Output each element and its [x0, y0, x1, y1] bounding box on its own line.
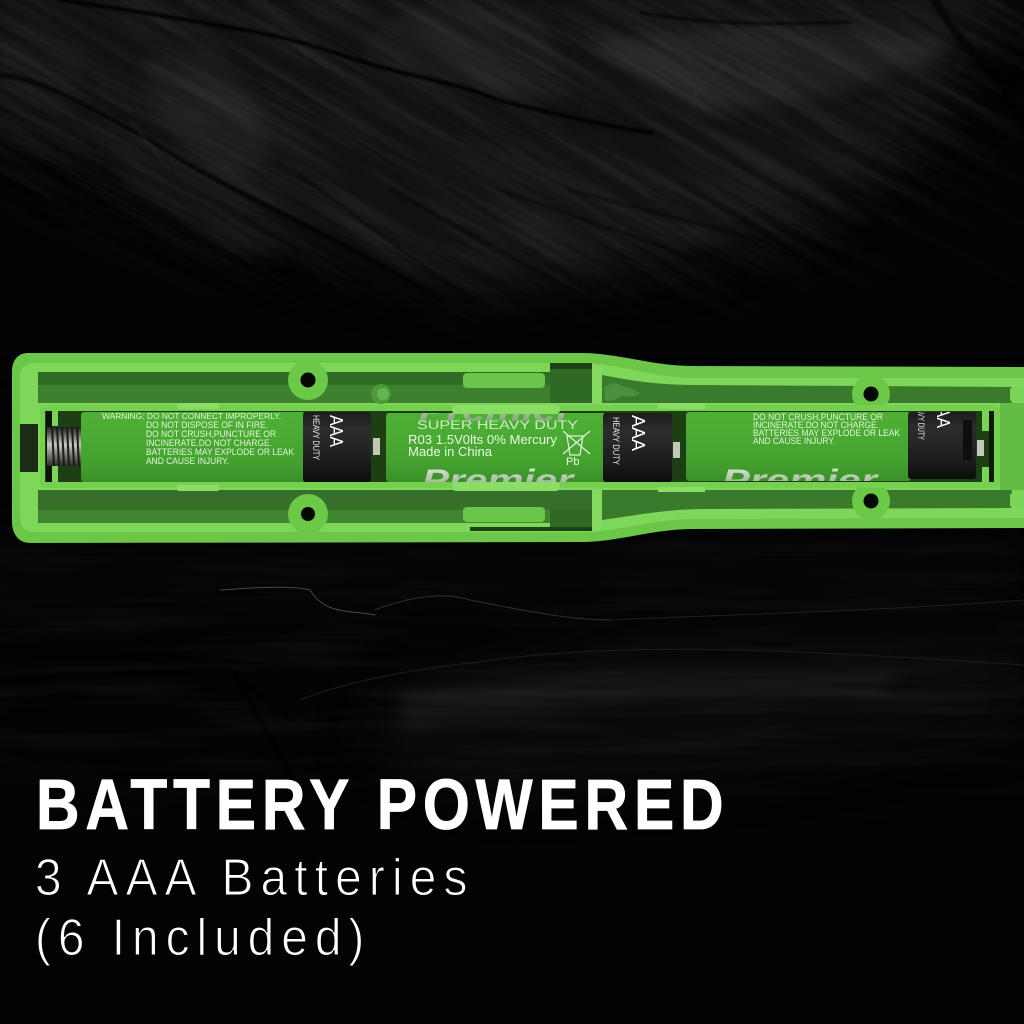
- battery 2: HEAVY DUTY: [611, 417, 621, 465]
- battery 1 warning text: [102, 411, 295, 467]
- screw post: bottom right: [852, 482, 890, 520]
- battery tray: [40, 405, 1000, 488]
- right end tabs: [1010, 387, 1024, 508]
- housing shell: [12, 353, 1024, 543]
- battery 3: Premier: [722, 464, 880, 497]
- shadowed rock areas: [0, 70, 1024, 380]
- screw post: bottom left: [288, 494, 328, 534]
- battery 2: [386, 413, 672, 482]
- battery 2: R03 1.5V0lts 0% Mercury: [408, 433, 558, 447]
- battery 2: Premier: [422, 464, 576, 497]
- right end block: [1000, 403, 1024, 490]
- battery 3: [686, 412, 976, 481]
- debris in right channel: [604, 383, 640, 400]
- battery 1 warning text: BATTERIES MAY EXPLODE OR LEAK: [146, 447, 295, 458]
- battery 3 warning text: [753, 414, 900, 444]
- battery 2: SUPER HEAVY DUTY: [417, 420, 578, 432]
- battery 1: [81, 411, 371, 482]
- battery 3 warning text: DO NOT DISPOSE OF IN FIRE.: [753, 404, 871, 415]
- battery 2: Pb: [566, 456, 579, 468]
- peg: [371, 384, 391, 404]
- battery 3 warning text: BATTERIES MAY EXPLODE OR LEAK: [753, 428, 901, 439]
- battery terminal 2: [673, 442, 680, 458]
- lower left channel: [38, 490, 592, 531]
- divider ribs: [592, 364, 602, 532]
- battery 2: AAA: [628, 415, 648, 451]
- screw post: top left: [288, 360, 328, 400]
- device: open green battery compartment: [12, 353, 1024, 543]
- screw post: top right: [852, 375, 890, 413]
- battery terminal 3: [977, 440, 984, 456]
- battery 1: HEAVY DUTY: [311, 415, 321, 460]
- battery 3 warning text: DO NOT CRUSH,PUNCTURE OR: [753, 412, 883, 423]
- battery 1 warning text: DO NOT CRUSH,PUNCTURE OR: [146, 429, 276, 440]
- recycling bin mark: [563, 431, 590, 455]
- battery 3 warning text: INCINERATE.DO NOT CHARGE.: [753, 420, 879, 431]
- battery 1 warning text: WARNING: DO NOT CONNECT IMPROPERLY.: [102, 411, 281, 421]
- clips on the rails: [463, 373, 545, 522]
- battery 1 warning text: INCINERATE.DO NOT CHARGE.: [146, 438, 272, 449]
- upper left channel: [38, 363, 592, 403]
- title: BATTERY POWERED: [36, 764, 724, 844]
- battery terminal 1: [373, 438, 380, 455]
- side slot: [20, 424, 38, 472]
- battery 3: HEAVY DUTY: [916, 400, 926, 440]
- lower right channel: [602, 490, 1012, 520]
- subtitle line 2: (6 Included): [35, 908, 364, 966]
- background: dark slate rock: [0, 0, 1024, 772]
- battery 1: AAA: [326, 415, 346, 447]
- inner rim highlight: [20, 363, 1024, 532]
- upper right channel: [602, 375, 1012, 403]
- battery 2: Premier: [419, 395, 575, 428]
- tray rail tabs: [177, 403, 705, 492]
- battery 1 warning text: AND CAUSE INJURY.: [146, 456, 229, 467]
- battery 1 warning text: DO NOT DISPOSE OF IN FIRE.: [146, 420, 268, 431]
- battery 2: Made in China: [408, 445, 492, 459]
- spring: [47, 427, 81, 466]
- battery 3 warning text: AND CAUSE INJURY.: [753, 436, 835, 447]
- battery 3: AAA: [933, 396, 953, 428]
- subtitle line 1: 3 AAA Batteries: [35, 848, 467, 906]
